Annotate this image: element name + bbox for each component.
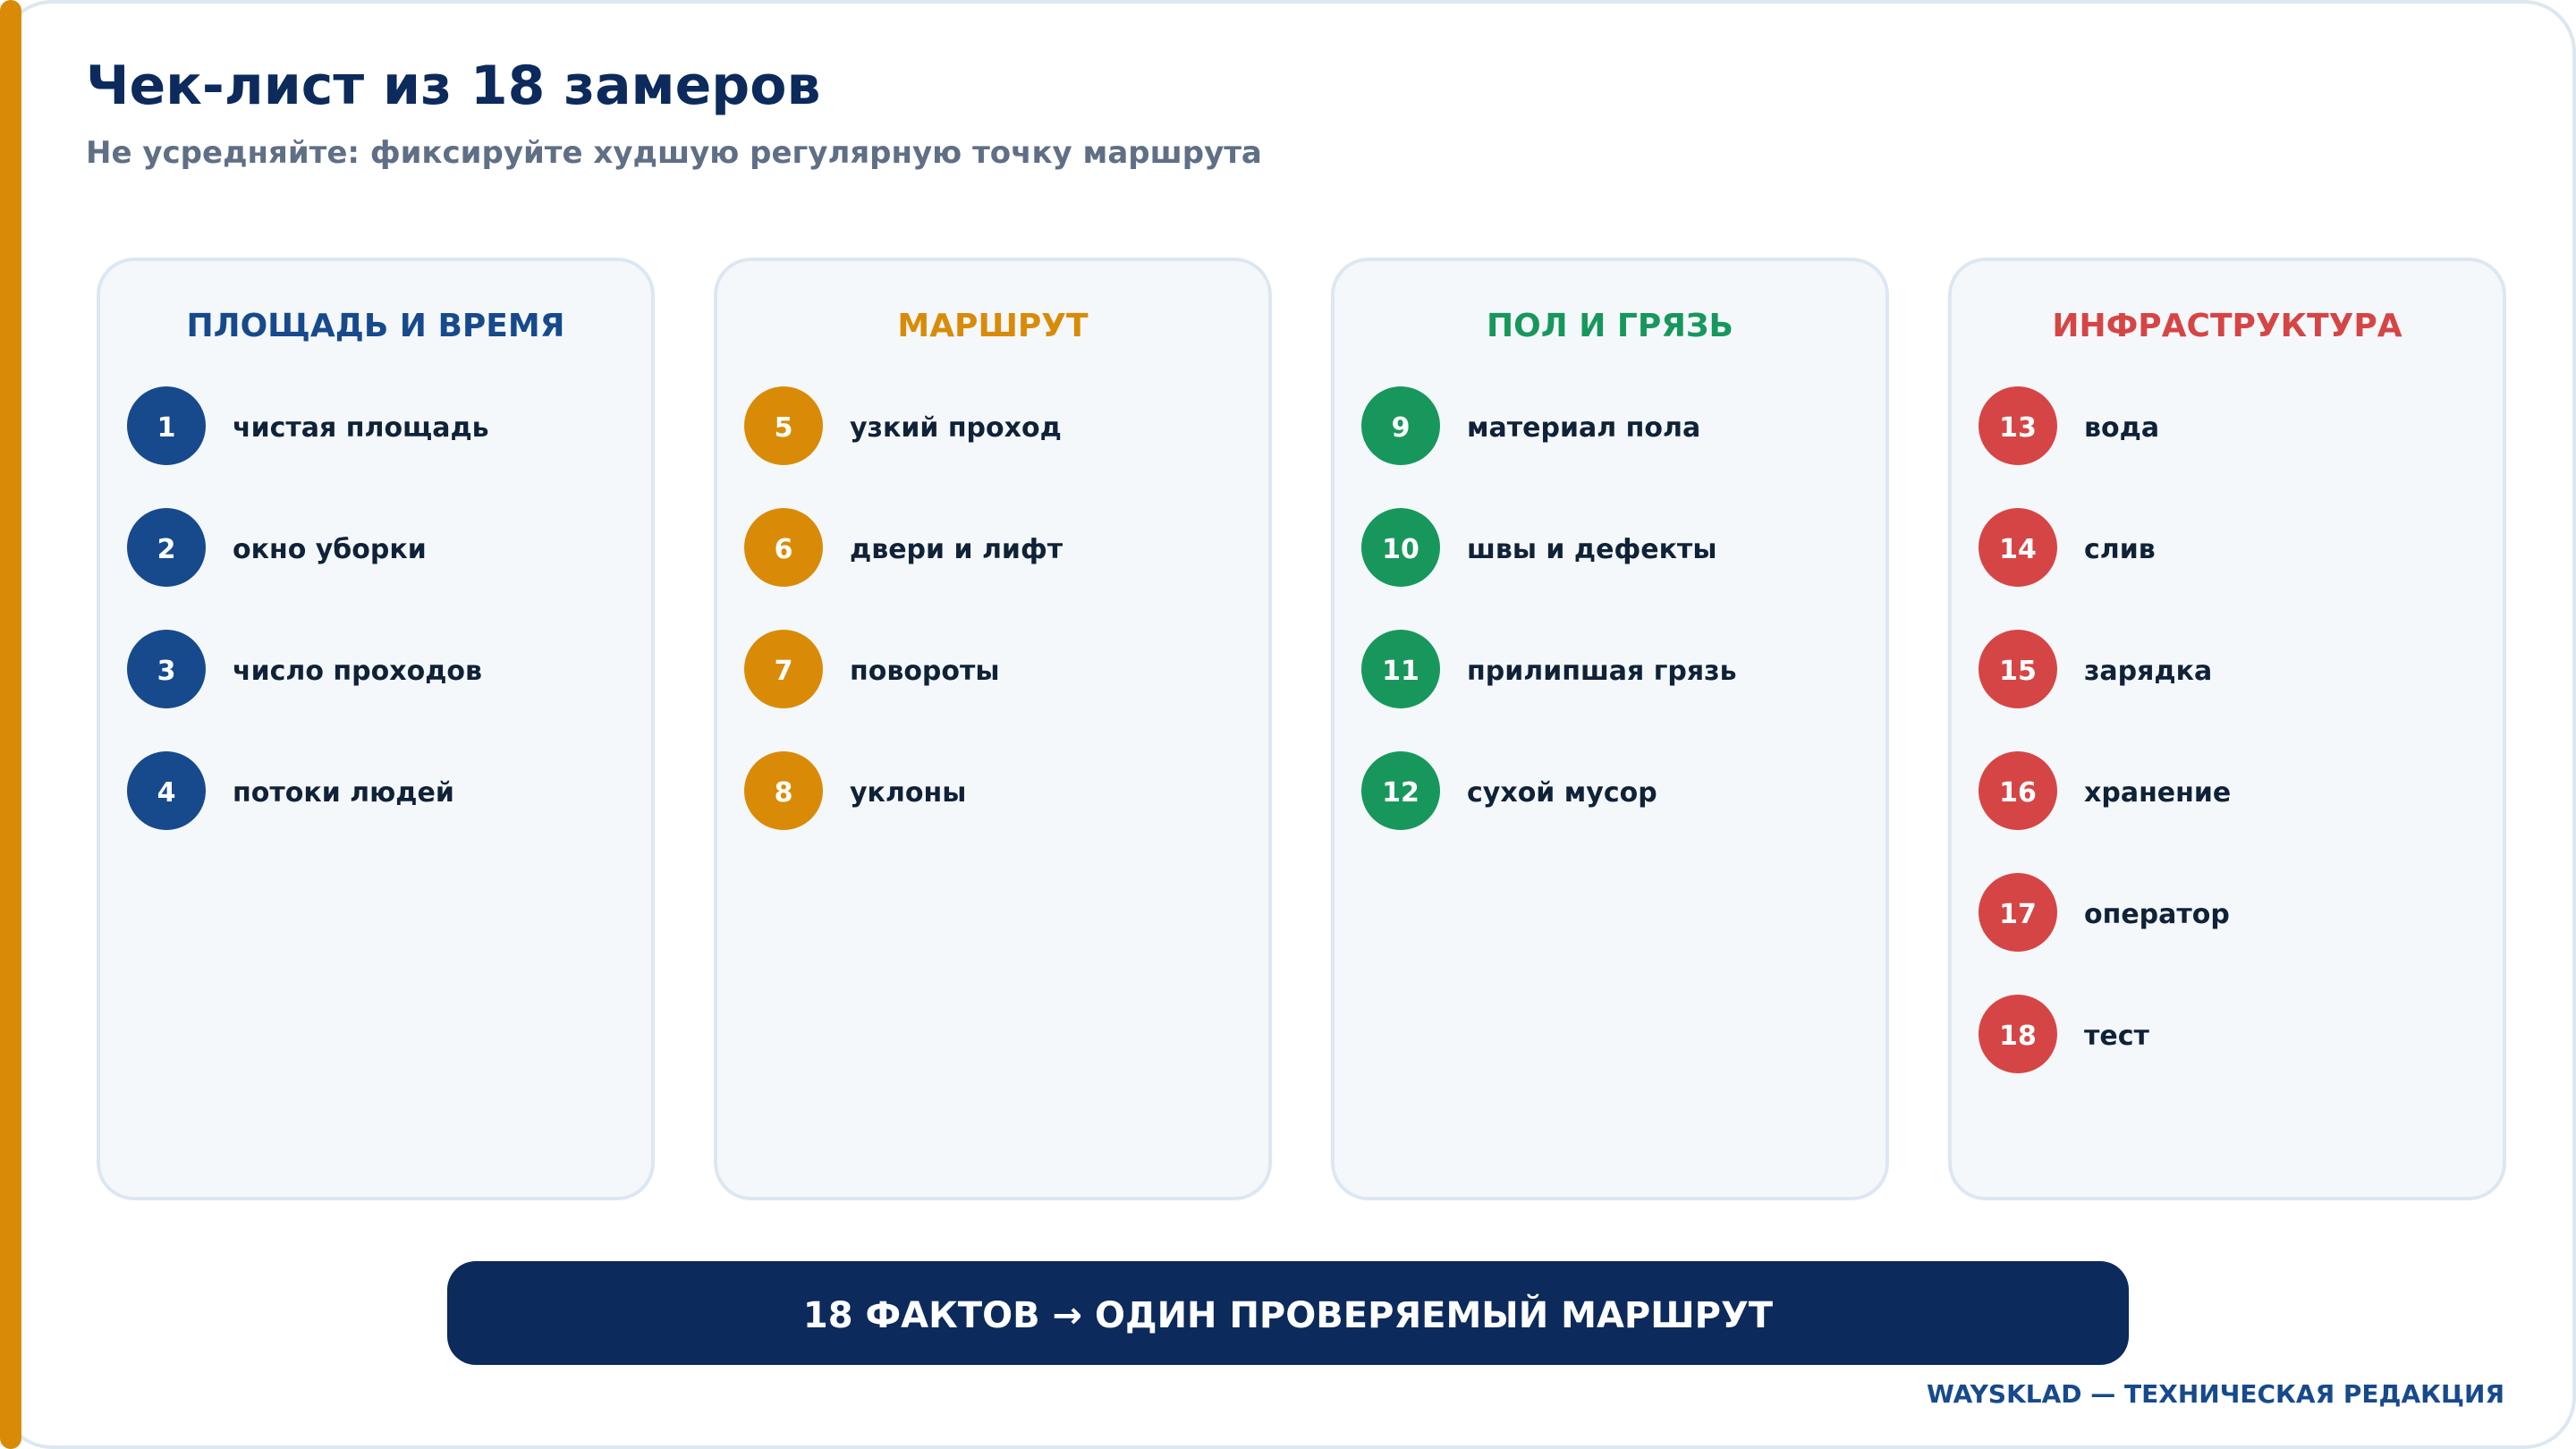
- panel: пол и грязь: [1333, 259, 1887, 1199]
- item 10: швы и дефекты: [1467, 534, 1716, 565]
- item 2: [127, 508, 427, 587]
- item 11: 11: [1382, 656, 1419, 687]
- item 11: [1361, 630, 1737, 708]
- item 15: 15: [1999, 656, 2037, 687]
- item 11: прилипшая грязь: [1467, 656, 1737, 687]
- item 14: [1979, 508, 2156, 587]
- item 10: [1361, 508, 1716, 587]
- item 3: 3: [157, 656, 175, 687]
- item 1: 1: [157, 412, 175, 444]
- item 18: [1979, 995, 2150, 1073]
- item 15: [1979, 630, 2212, 708]
- panel: площадь и время: [98, 259, 653, 1199]
- item 6: двери и лифт: [850, 534, 1063, 565]
- item 5: узкий проход: [850, 412, 1062, 444]
- item 2: 2: [157, 534, 175, 565]
- item 2: окно уборки: [233, 534, 427, 565]
- callout banner: 18 ФАКТОВ → ОДИН ПРОВЕРЯЕМЫЙ МАРШРУТ: [803, 1293, 1774, 1336]
- item 9: материал пола: [1467, 412, 1700, 444]
- item 9: 9: [1392, 412, 1410, 444]
- item 1: чистая площадь: [233, 412, 489, 444]
- item 15: зарядка: [2084, 656, 2212, 687]
- title: Чек-лист из 18 замеров: [86, 55, 820, 117]
- item 14: 14: [1999, 534, 2037, 565]
- heading: инфраструктура: ИНФРАСТРУКТУРА: [2052, 308, 2402, 344]
- item 13: [1979, 386, 2159, 465]
- subtitle: Не усредняйте: фиксируйте худшую регулярную точку маршрута: [86, 135, 1262, 171]
- callout banner: [447, 1261, 2129, 1365]
- item 7: [744, 630, 1000, 708]
- panel: маршрут: [716, 259, 1270, 1199]
- item 12: [1361, 751, 1657, 830]
- item 3: число проходов: [233, 656, 482, 687]
- footer credit: WAYSKLAD — ТЕХНИЧЕСКАЯ РЕДАКЦИЯ: [1927, 1379, 2504, 1409]
- item 3: [127, 630, 482, 708]
- heading: маршрут: МАРШРУТ: [897, 308, 1089, 344]
- item 1: [127, 386, 489, 465]
- item 16: 16: [1999, 777, 2037, 809]
- item 8: уклоны: [850, 777, 966, 809]
- item 13: 13: [1999, 412, 2037, 444]
- item 12: 12: [1382, 777, 1419, 809]
- item 17: оператор: [2084, 899, 2230, 930]
- item 9: [1361, 386, 1700, 465]
- item 6: [744, 508, 1063, 587]
- item 4: [127, 751, 454, 830]
- item 17: 17: [1999, 899, 2037, 930]
- panel: инфраструктура: [1950, 259, 2504, 1199]
- item 12: сухой мусор: [1467, 777, 1657, 809]
- item 5: [744, 386, 1062, 465]
- item 7: повороты: [850, 656, 1000, 687]
- item 4: 4: [157, 777, 175, 809]
- item 18: тест: [2084, 1021, 2150, 1052]
- item 13: вода: [2084, 412, 2159, 444]
- heading: площадь и время: ПЛОЩАДЬ И ВРЕМЯ: [187, 308, 564, 344]
- accent bar: [0, 0, 21, 1449]
- item 5: 5: [775, 412, 792, 444]
- item 10: 10: [1382, 534, 1419, 565]
- item 16: [1979, 751, 2231, 830]
- heading: пол и грязь: ПОЛ И ГРЯЗЬ: [1487, 308, 1733, 344]
- item 17: [1979, 873, 2230, 952]
- item 8: [744, 751, 966, 830]
- item 4: потоки людей: [233, 777, 454, 809]
- item 16: хранение: [2084, 777, 2231, 809]
- item 18: 18: [1999, 1021, 2037, 1052]
- item 7: 7: [775, 656, 792, 687]
- item 14: слив: [2084, 534, 2156, 565]
- item 6: 6: [775, 534, 792, 565]
- item 8: 8: [775, 777, 792, 809]
